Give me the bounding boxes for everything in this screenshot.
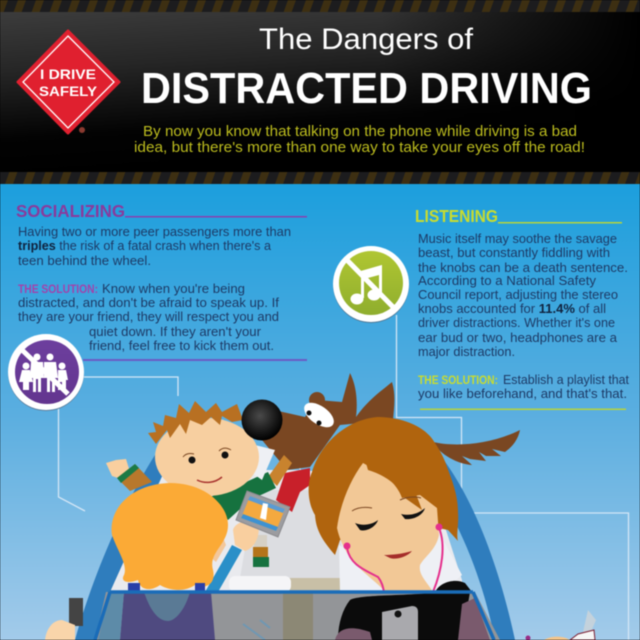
- listening body: Establish a playlist that: [503, 372, 629, 387]
- listening body: major distraction.: [418, 344, 515, 359]
- kid hair: [148, 401, 243, 444]
- woman eyes: [355, 508, 425, 530]
- listening body: you like beforehand, and that's that.: [418, 386, 627, 401]
- woman face: [337, 463, 439, 592]
- listening body: According to a National Safety: [418, 273, 597, 288]
- earphones: [344, 524, 443, 592]
- listening body: ear bud or two, headphones are a: [418, 330, 618, 345]
- header banner: [0, 0, 640, 184]
- listening body: beast, but constantly fiddling with: [418, 245, 610, 260]
- woman lips: [384, 551, 412, 559]
- logo: I Drive Safely: [18, 31, 119, 133]
- heading: listening: LISTENING: [415, 206, 498, 226]
- listening body: knobs accounted for 11.4% of all: [418, 301, 606, 316]
- subtitle: By now you know that talking on the phone while driving is a bad: [143, 124, 577, 140]
- driver hand: [45, 598, 83, 640]
- socializing body: THE SOLUTION:: [18, 284, 98, 296]
- listening body: driver distractions. Whether it's one: [418, 315, 615, 330]
- mom torso: [98, 583, 215, 640]
- socializing body: distracted, and don't be afraid to speak up. If: [18, 295, 279, 310]
- logo: I Drive Safely: I DRIVE: [40, 66, 96, 82]
- woman torso and phone: [335, 581, 490, 640]
- rear seat: [110, 470, 462, 592]
- listening body: Council report, adjusting the stereo: [418, 287, 618, 302]
- dog tail: [433, 430, 520, 465]
- connector lines: [58, 315, 628, 640]
- mom hair: [112, 483, 228, 590]
- socializing body: [18, 224, 291, 353]
- title line 1: The Dangers of: [259, 23, 474, 56]
- icon: no passengers: [8, 334, 84, 411]
- kid arm left: [106, 459, 130, 480]
- kid head: [155, 418, 259, 496]
- socializing body: they are your friend, they will respect you and: [18, 309, 279, 324]
- red scarf: [276, 468, 310, 512]
- listening body: the knobs can be a death sentence.: [418, 260, 628, 275]
- background sky: [0, 184, 640, 640]
- woman hair: [309, 417, 458, 555]
- logo: I Drive Safely: SAFELY: [39, 83, 98, 99]
- socializing body: teen behind the wheel.: [18, 253, 151, 268]
- kid mouth: [197, 477, 222, 482]
- windshield frame: [95, 592, 494, 640]
- socializing body: Know when you're being: [102, 281, 245, 296]
- title line 2: DISTRACTED DRIVING: [141, 64, 592, 113]
- socializing body: quiet down. If they aren't your: [89, 324, 262, 339]
- heading: socializing: SOCIALIZING: [16, 201, 125, 221]
- woman: [309, 417, 462, 592]
- far hand with phone: [526, 610, 596, 640]
- icon: no music: [333, 246, 409, 323]
- panel: listening: [415, 206, 629, 410]
- scarf end: [253, 535, 269, 567]
- black ball: [242, 400, 282, 440]
- kid shirt: [210, 472, 276, 520]
- kid arm right: [268, 455, 292, 486]
- kid eyes: [183, 448, 231, 464]
- listening body: Music itself may soothe the savage: [418, 231, 617, 246]
- subtitle: [134, 124, 585, 156]
- mom arm and hand: [205, 520, 259, 592]
- woman collar: [339, 530, 462, 592]
- kid: [106, 401, 292, 567]
- socializing body: friend, feel free to kick them out.: [89, 338, 274, 353]
- subtitle: idea, but there's more than one way to take your eyes off the road!: [134, 140, 585, 156]
- socializing body: triples the risk of a fatal crash when there's a: [18, 238, 272, 253]
- windshield pillars: [75, 455, 515, 640]
- dog: [262, 373, 394, 470]
- tablet: [236, 491, 290, 537]
- listening body: THE SOLUTION:: [418, 375, 498, 387]
- woman fringe: [366, 463, 405, 498]
- dashboard glass: [95, 592, 500, 640]
- panel: socializing: [16, 201, 307, 361]
- listening body: [418, 231, 629, 401]
- illustration: car with distracted occupants: [45, 373, 596, 640]
- socializing body: Having two or more peer passengers more than: [18, 224, 291, 239]
